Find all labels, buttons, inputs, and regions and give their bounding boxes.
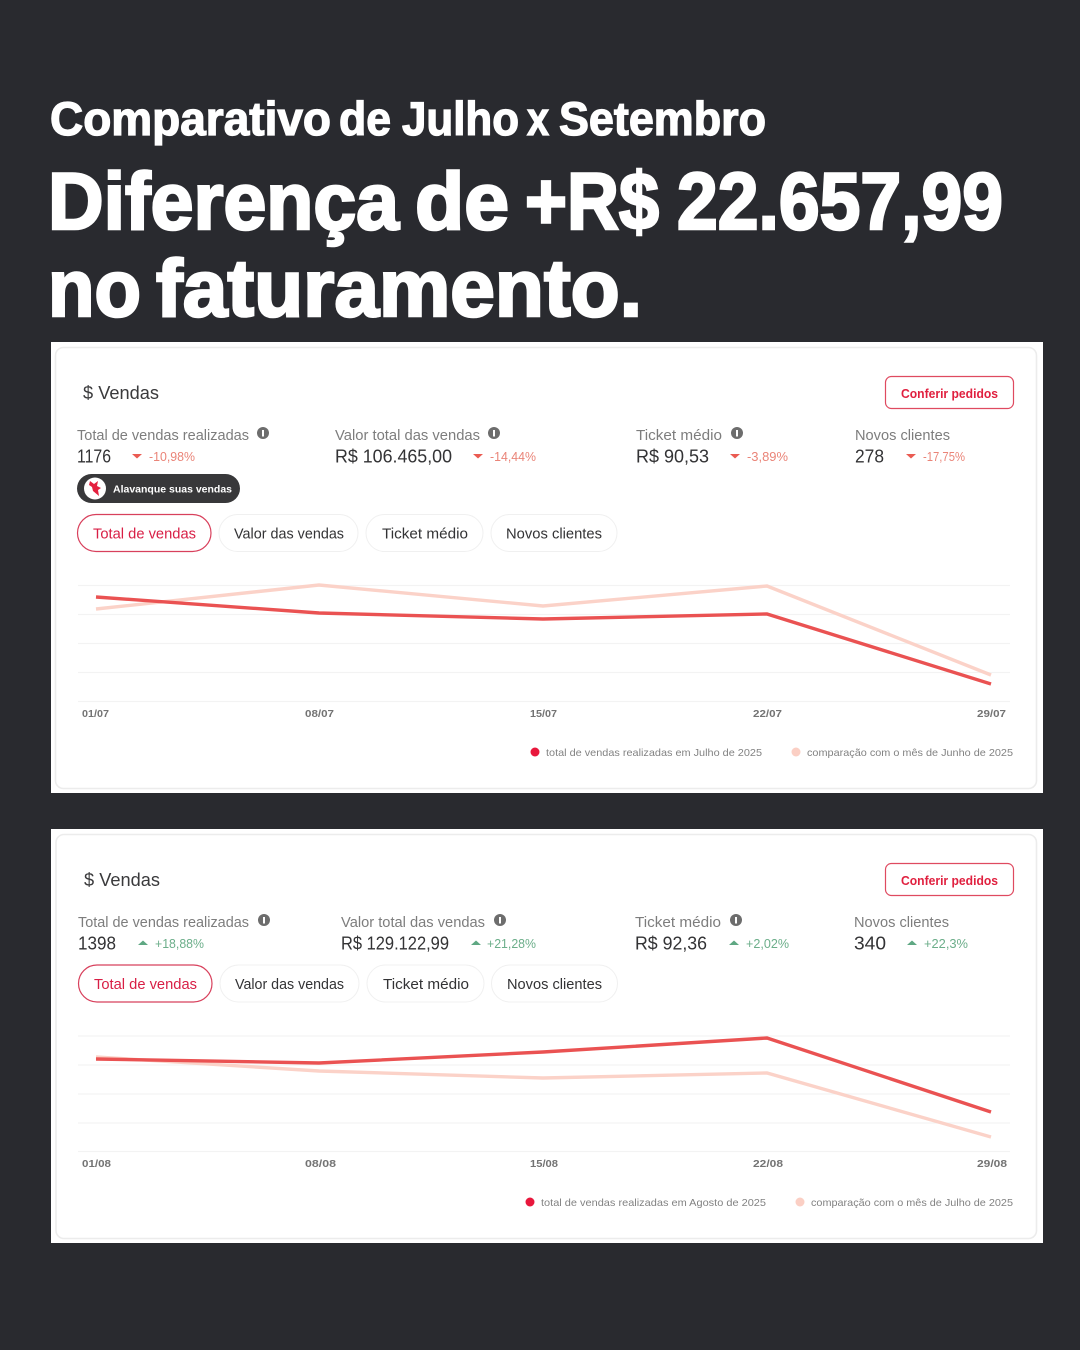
- metric: valor total: R$ 129.122,99: [341, 932, 449, 954]
- tabs: Total de vendas: [94, 977, 197, 993]
- legend: total de vendas realizadas em Agosto de 2025: [541, 1197, 766, 1209]
- line chart: July vs June: 01/07: [82, 708, 109, 720]
- line chart: July vs June: 22/07: [753, 708, 782, 720]
- metric: valor total: +21,28%: [487, 937, 536, 951]
- heading: revenue difference: +R$: [525, 157, 659, 247]
- badge: alavanque suas vendas: [77, 474, 240, 503]
- legend: comparação com o mês de Junho de 2025: [807, 747, 1013, 759]
- metric: novos clientes: +22,3%: [924, 937, 968, 951]
- line chart: August vs July: 29/08: [977, 1158, 1007, 1170]
- tabs: Novos clientes: [506, 526, 602, 542]
- tabs: [78, 965, 618, 1002]
- legend: total de vendas realizadas em Julho de 2025: [546, 747, 762, 759]
- legend: comparação com o mês de Julho de 2025: [811, 1197, 1013, 1209]
- heading: revenue difference: 22.657,99: [677, 157, 1003, 247]
- line chart: July vs June: 08/07: [305, 708, 334, 720]
- line chart: August vs July: [78, 1036, 1010, 1170]
- heading: revenue difference: [48, 157, 1003, 334]
- metric: ticket medio: +2,02%: [746, 937, 789, 951]
- metric: valor total: -14,44%: [490, 450, 536, 464]
- heading: revenue difference: de: [415, 157, 509, 247]
- metric: novos clientes: [855, 428, 965, 466]
- metric: ticket medio: [635, 914, 789, 954]
- metric: total de vendas: [78, 914, 270, 954]
- button: conferir pedidos: Conferir pedidos: [901, 387, 998, 401]
- panel: July sales dashboard: [51, 342, 1043, 793]
- tabs: Valor das vendas: [234, 526, 344, 542]
- tabs: Novos clientes: [507, 977, 602, 993]
- metric: ticket medio: R$ 90,53: [636, 446, 709, 466]
- heading: revenue difference: no: [48, 244, 141, 334]
- tabs: Ticket médio: [382, 526, 468, 542]
- metric: ticket medio: Ticket médio: [635, 915, 721, 931]
- metric: valor total: Valor total das vendas: [335, 428, 480, 444]
- title: comparison subtitle: x: [527, 92, 549, 145]
- tabs: Valor das vendas: [235, 977, 344, 993]
- metric: ticket medio: R$ 92,36: [635, 932, 707, 954]
- line chart: August vs July: 15/08: [530, 1158, 558, 1170]
- badge: alavanque suas vendas: Alavanque suas vendas: [113, 484, 232, 496]
- title: comparison subtitle: de: [339, 92, 391, 145]
- metric: novos clientes: 278: [855, 446, 884, 466]
- metric: ticket medio: Ticket médio: [636, 428, 722, 444]
- metric: novos clientes: Novos clientes: [855, 428, 950, 444]
- metric: total de vendas: 1398: [78, 932, 116, 954]
- title: comparison subtitle: Comparativo: [50, 92, 331, 145]
- legend: [530, 747, 1013, 759]
- metric: valor total: Valor total das vendas: [341, 915, 485, 931]
- metric: novos clientes: -17,75%: [923, 450, 965, 464]
- metric: total de vendas: [77, 427, 269, 466]
- legend: [526, 1197, 1013, 1209]
- button: conferir pedidos: [886, 864, 1014, 896]
- metric: valor total: [335, 427, 536, 466]
- metric: novos clientes: [854, 915, 968, 954]
- metric: ticket medio: [636, 427, 788, 466]
- tabs: [78, 514, 617, 552]
- button: conferir pedidos: [886, 376, 1014, 408]
- metric: novos clientes: Novos clientes: [854, 915, 949, 931]
- metric: total de vendas: 1176: [77, 446, 111, 466]
- title: comparison subtitle: Julho: [402, 92, 519, 145]
- heading: revenue difference: Diferença: [48, 157, 400, 247]
- metric: valor total: R$ 106.465,00: [335, 446, 452, 466]
- line chart: July vs June: 15/07: [530, 708, 557, 720]
- heading: revenue difference: faturamento.: [156, 244, 642, 334]
- metric: total de vendas: -10,98%: [149, 450, 195, 464]
- metric: total de vendas: Total de vendas realizadas: [77, 428, 249, 444]
- line chart: July vs June: [78, 585, 1010, 720]
- tabs: Ticket médio: [383, 977, 469, 993]
- metric: valor total: [341, 914, 536, 954]
- metric: ticket medio: -3,89%: [747, 450, 788, 464]
- panel heading: Vendas: $ Vendas: [83, 383, 159, 403]
- line chart: August vs July: 01/08: [82, 1158, 111, 1170]
- line chart: August vs July: 22/08: [753, 1158, 783, 1170]
- metric: total de vendas: Total de vendas realizadas: [78, 915, 249, 931]
- metric: total de vendas: +18,88%: [155, 937, 204, 951]
- button: conferir pedidos: Conferir pedidos: [901, 874, 998, 888]
- metric: novos clientes: 340: [854, 932, 886, 954]
- title: comparison subtitle: [50, 92, 766, 145]
- title: comparison subtitle: Setembro: [559, 92, 766, 145]
- line chart: July vs June: 29/07: [977, 708, 1006, 720]
- line chart: August vs July: 08/08: [305, 1158, 336, 1170]
- panel heading: Vendas: $ Vendas: [84, 870, 160, 890]
- tabs: Total de vendas: [93, 526, 196, 542]
- panel: August sales dashboard: [51, 829, 1043, 1243]
